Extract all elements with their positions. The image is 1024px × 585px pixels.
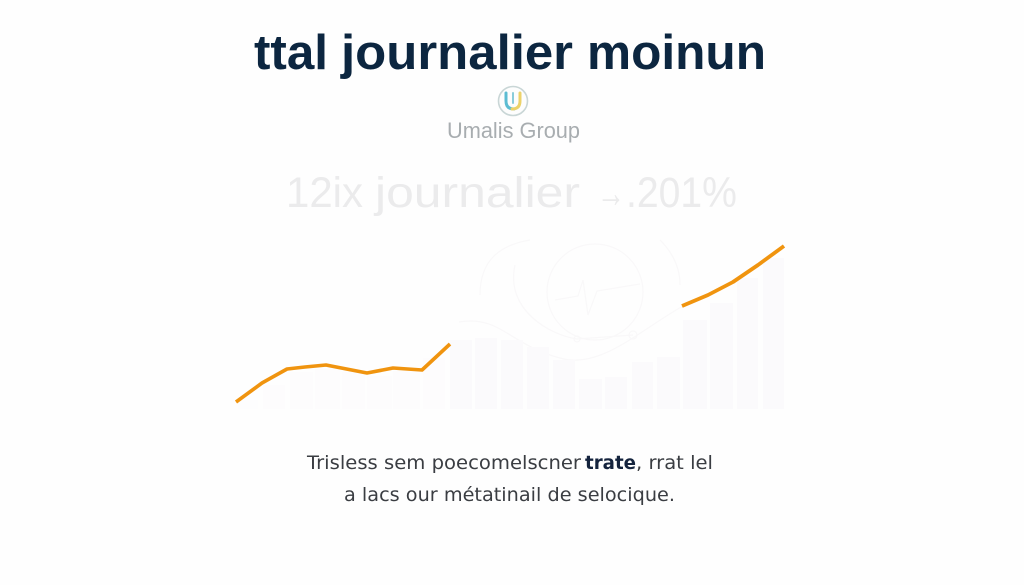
line chart: right orange segment xyxy=(682,246,784,306)
caption bold word: trate xyxy=(585,452,636,474)
subtitle arrow: → xyxy=(597,169,625,216)
logo wordmark: Umalis Group xyxy=(447,118,580,143)
title word 3: moinun xyxy=(587,26,766,80)
caption line 1 end: , rrat lel xyxy=(636,452,713,474)
bar chart background xyxy=(238,258,784,409)
subtitle word: journalier xyxy=(373,169,580,217)
subtitle percentage: .201% xyxy=(626,169,737,217)
icon: logo ring xyxy=(498,86,528,116)
title word 1: ttal xyxy=(254,26,328,80)
logo: Umalis Group xyxy=(447,86,580,143)
subtitle number: 12ix xyxy=(286,169,363,217)
caption line 1 start: Trisless sem poecomelscner xyxy=(306,452,581,474)
caption text xyxy=(306,452,713,506)
title word 2: journalier xyxy=(340,26,573,80)
caption line 2: a lacs our métatinail de selocique. xyxy=(344,484,675,506)
title xyxy=(254,26,766,80)
line chart: left orange segment xyxy=(236,344,450,402)
faded subtitle xyxy=(286,169,737,217)
faded background illustration xyxy=(459,240,683,360)
